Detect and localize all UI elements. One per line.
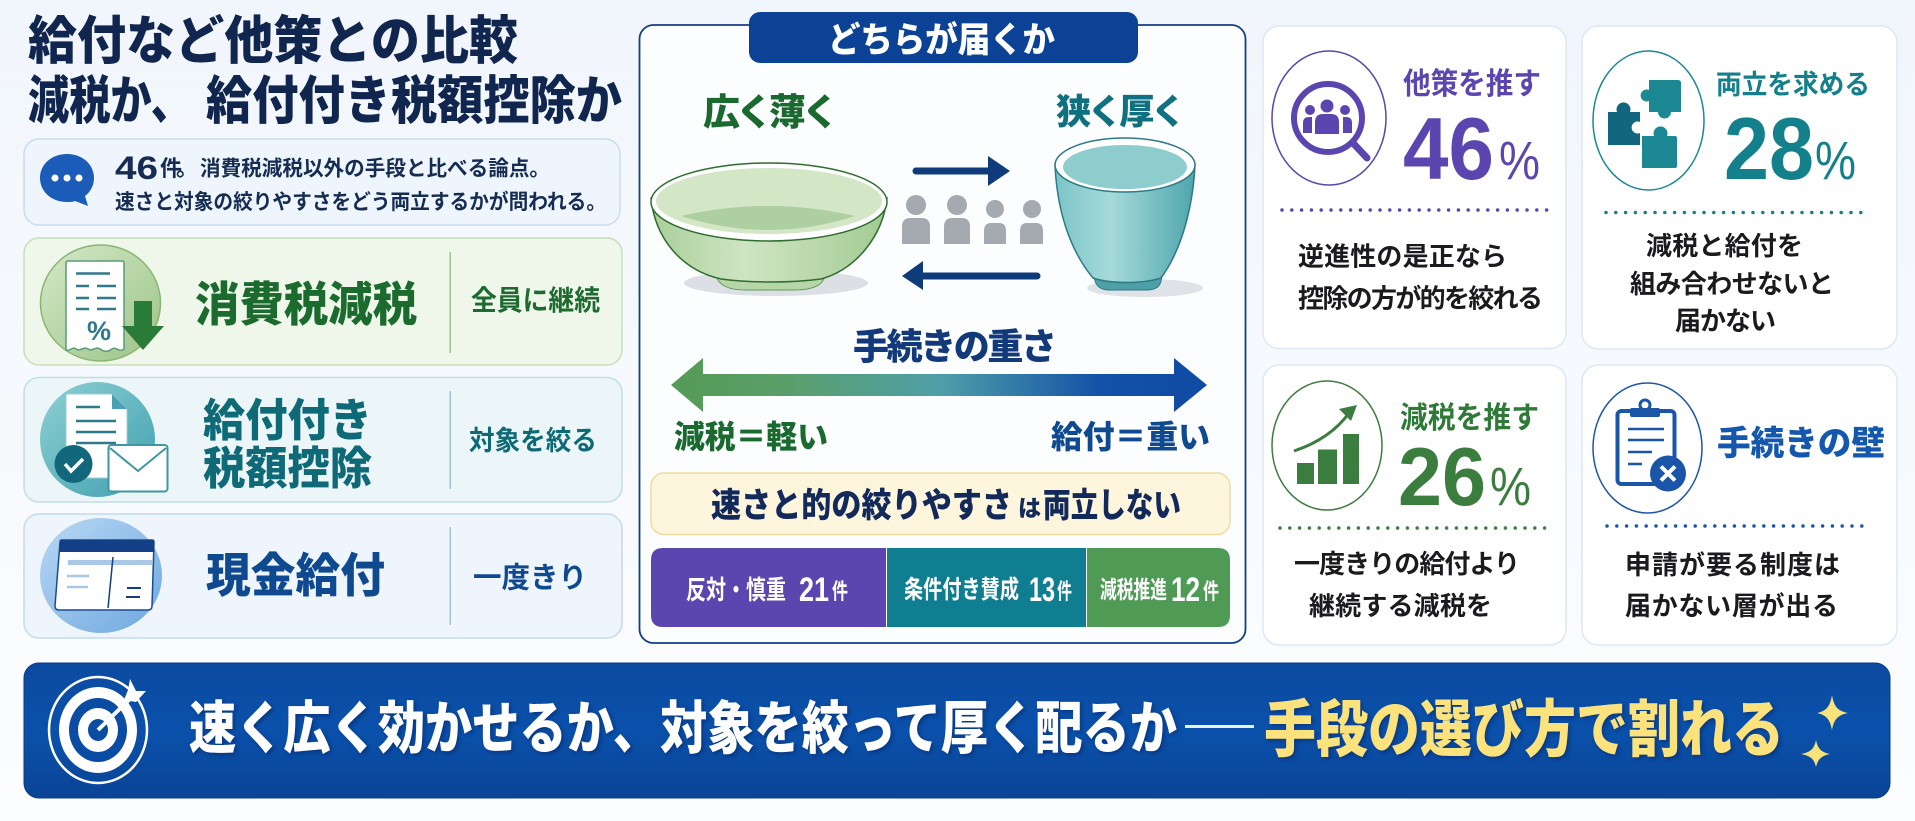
dotted line — [1606, 211, 1867, 214]
stacked bar: 件 — [1203, 579, 1219, 604]
callout: 速さと的の絞りやすさ — [711, 487, 1012, 525]
panel: cash payment — [24, 514, 622, 638]
heading: 他策を推す — [1403, 68, 1541, 101]
intro text: 消費税減税以外の手段と比べる論点。 — [200, 156, 550, 180]
panel: refundable tax credit — [24, 378, 622, 502]
icon: sparkles — [1801, 695, 1848, 767]
stacked bar: 13 — [1029, 571, 1055, 609]
heading — [203, 395, 372, 494]
callout: は — [1018, 495, 1041, 521]
icon: receipt with down arrow: % — [87, 316, 111, 346]
stat 28%: % — [1815, 131, 1856, 191]
stacked bar: 減税推進 — [1100, 577, 1167, 604]
heading pill — [749, 12, 1138, 63]
description: 届かない — [1675, 306, 1776, 336]
icon: document with check and envelope — [40, 382, 168, 497]
title: 給付など他策との比較 — [28, 13, 518, 71]
stat 26% — [1398, 430, 1531, 523]
description: 控除の方が的を絞れる — [1298, 284, 1543, 314]
stat 26%: % — [1490, 457, 1531, 517]
description: 減税と給付を — [1646, 231, 1803, 261]
heading: 減税を推す — [1400, 402, 1539, 435]
scale arrow — [671, 358, 1207, 412]
icon: wide bowl — [651, 163, 887, 296]
panel: procedural wall — [1582, 365, 1897, 645]
stacked bar — [651, 548, 1230, 627]
description — [1630, 231, 1834, 336]
title: 減税か、 — [28, 73, 192, 131]
heading: 消費税減税 — [195, 278, 417, 331]
panel: tax cut 26% — [1263, 365, 1566, 645]
stacked bar: 12 — [1171, 571, 1200, 609]
stacked bar: 件 — [1057, 579, 1072, 604]
description — [1294, 549, 1520, 621]
icon: receipt with down arrow — [40, 245, 164, 361]
description: 逆進性の是正なら — [1298, 242, 1507, 272]
heading: 両立を求める — [1716, 70, 1870, 100]
stacked bar: 条件付き賛成 — [904, 576, 1019, 604]
arrow: left — [923, 272, 1037, 280]
dotted line — [1282, 208, 1547, 212]
description — [1625, 550, 1840, 621]
label: wide and thin: 広く薄く — [703, 92, 839, 133]
label: 全員に継続 — [471, 285, 600, 316]
heading: 給付付き — [203, 395, 372, 446]
dotted line — [1607, 524, 1869, 528]
icon: chat bubble — [40, 154, 94, 206]
panel: intro note — [24, 139, 620, 225]
stat 28%: 28 — [1724, 99, 1814, 198]
description: 届かない層が出る — [1625, 591, 1838, 621]
stat 46%: % — [1499, 131, 1540, 191]
panel: other measures 46% — [1263, 26, 1566, 348]
banner: conclusion — [24, 663, 1890, 798]
dash — [1185, 725, 1254, 728]
statement: 速く広く効かせるか、対象を絞って厚く配るか — [189, 697, 1177, 761]
title — [28, 13, 622, 131]
stat 46%: 46 — [1403, 99, 1494, 198]
description: 組み合わせないと — [1630, 269, 1834, 299]
label: procedural burden: 手続きの重さ — [853, 326, 1057, 367]
stat 26%: 26 — [1398, 430, 1486, 523]
description — [1298, 242, 1543, 314]
description: 申請が要る制度は — [1625, 550, 1840, 580]
arrow head: left — [902, 261, 923, 290]
icon: magnifier with people — [1272, 51, 1386, 185]
icon: puzzle pieces — [1593, 51, 1704, 190]
heading pill: どちらが届くか — [828, 20, 1055, 60]
icon: people — [902, 195, 1043, 244]
callout — [651, 473, 1230, 534]
icon: bank book — [40, 518, 162, 633]
icon: narrow cup — [1055, 138, 1203, 297]
panel: which reaches — [640, 12, 1246, 643]
stacked bar: 件 — [832, 579, 848, 604]
icon: rising bars — [1272, 381, 1382, 510]
panel: consumption tax cut — [24, 238, 622, 365]
panel: both required 28% — [1582, 26, 1897, 349]
callout: 両立しない — [1043, 487, 1181, 525]
title: 給付付き税額控除か — [206, 73, 622, 131]
stacked bar: 21 — [799, 571, 829, 609]
intro text: 46 — [115, 150, 158, 186]
intro text — [115, 150, 606, 214]
heading: 現金給付 — [206, 549, 385, 602]
dotted line — [1280, 526, 1545, 530]
label: 対象を絞る — [469, 426, 597, 456]
description: 継続する減税を — [1309, 591, 1492, 621]
label: 一度きり — [473, 562, 587, 594]
description: 一度きりの給付より — [1294, 549, 1520, 579]
label: narrow and thick: 狭く厚く — [1056, 93, 1186, 132]
arrow: right — [916, 168, 988, 174]
stacked bar: 反対・慎重 — [686, 575, 786, 605]
highlight statement: 手段の選び方で割れる — [1264, 696, 1784, 765]
intro text: 件。 — [160, 156, 198, 181]
icon: target with dart — [49, 677, 147, 783]
heading: 手続きの壁 — [1717, 425, 1885, 463]
heading: 税額控除 — [203, 443, 372, 494]
label: payment heavy: 給付＝重い — [1051, 419, 1210, 455]
label: tax cut light: 減税＝軽い — [674, 419, 828, 455]
icon: clipboard with x — [1593, 383, 1702, 513]
intro text: 速さと対象の絞りやすさをどう両立するかが問われる。 — [115, 190, 606, 214]
arrow head: right — [988, 156, 1010, 186]
